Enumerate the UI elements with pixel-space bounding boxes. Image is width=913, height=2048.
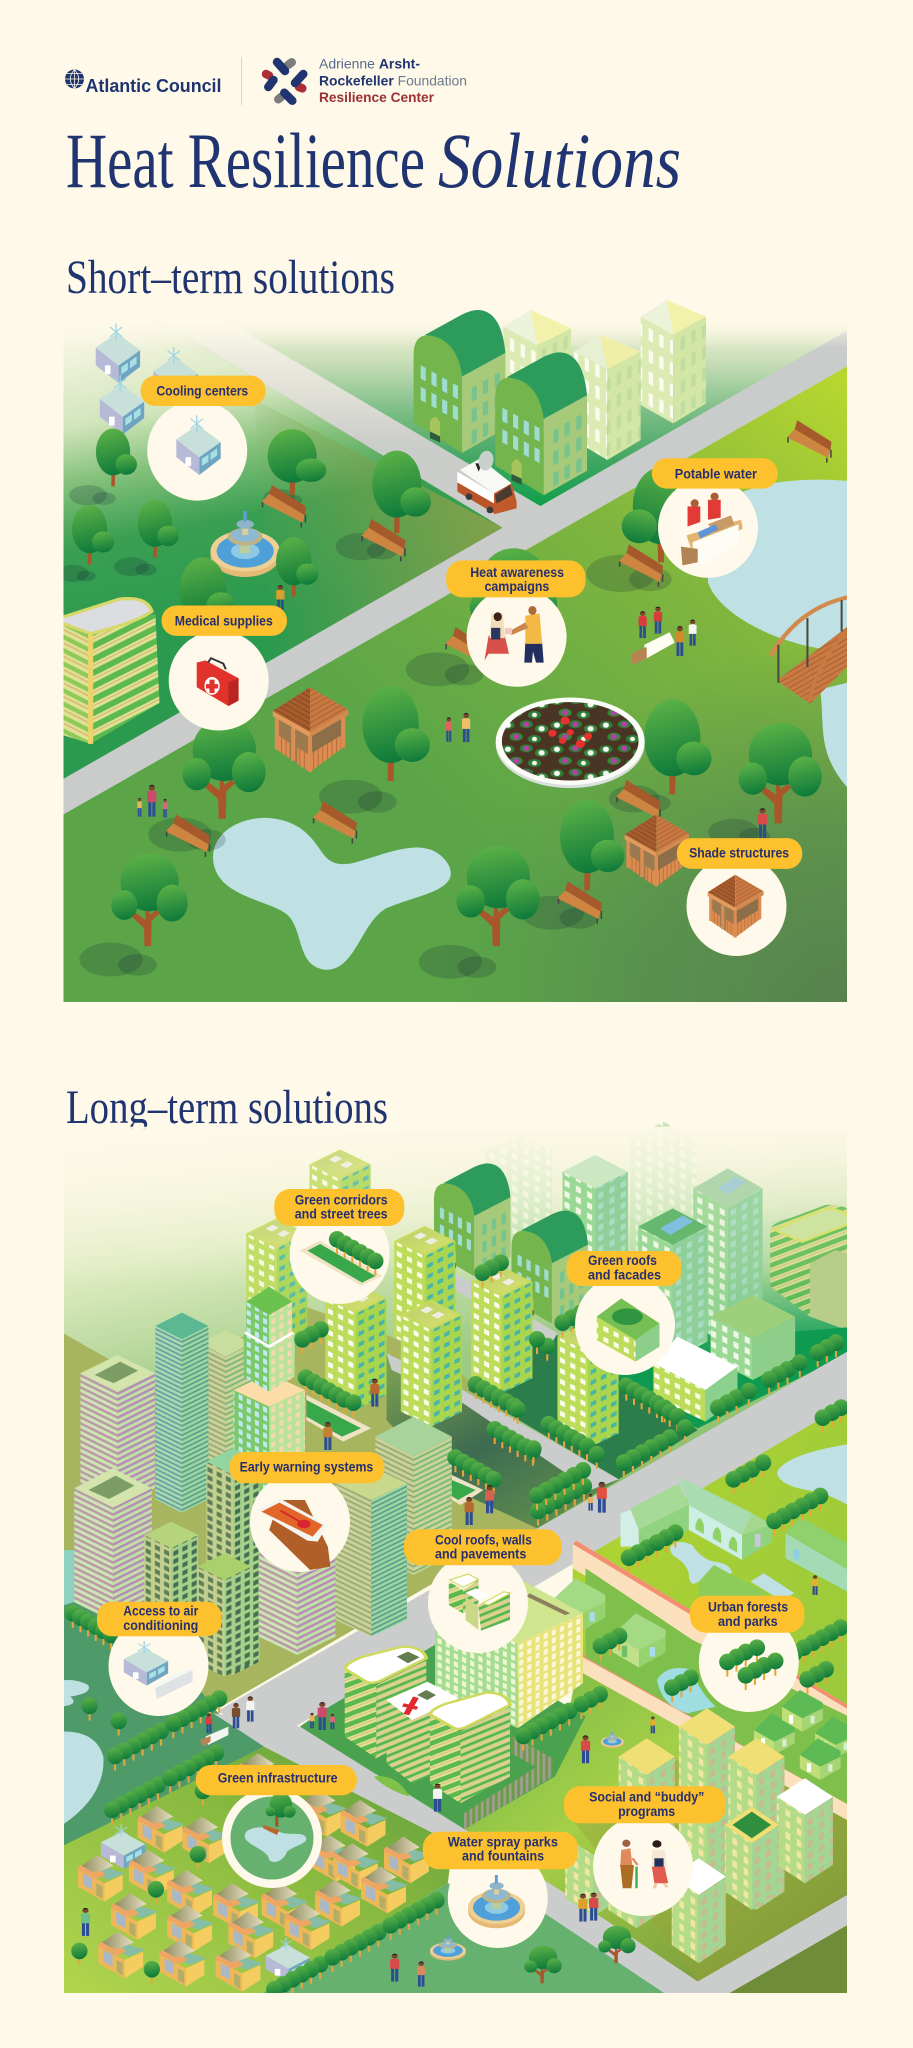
- icon: air conditioner and building: [124, 1641, 193, 1699]
- road network: [60, 326, 856, 814]
- heading: short-term: Short–term solutions: [66, 251, 395, 304]
- callout: Access to air conditioning: conditioning: [123, 1618, 198, 1633]
- callout: Access to air conditioning: [97, 1602, 222, 1716]
- trees and benches, upper lawn: [72, 429, 431, 636]
- people: [137, 585, 767, 838]
- icon: news van: [457, 449, 517, 514]
- panel: short-term scene: [57, 300, 860, 1011]
- title: Solutions: [438, 117, 681, 204]
- callout: Social and buddy programs: [564, 1786, 726, 1916]
- callout: Cool roofs, walls and pavements: Cool roofs, walls: [435, 1532, 532, 1547]
- callout: Heat awareness campaigns: [446, 560, 586, 687]
- lake right: [708, 480, 856, 654]
- icon: fountain: [211, 511, 280, 577]
- callout: Cool roofs, walls and pavements: and pavements: [435, 1547, 526, 1562]
- road: side streets: [387, 1273, 619, 1490]
- building plot: [225, 320, 847, 506]
- callout: Urban forests and parks: [690, 1596, 804, 1712]
- callout: Green roofs and facades: and facades: [588, 1267, 661, 1282]
- callout: Green infrastructure: [196, 1765, 357, 1888]
- callout: Green corridors and street trees: and street trees: [295, 1206, 388, 1221]
- ground: sky fade: [60, 1130, 856, 1563]
- road: main avenue: [218, 1347, 856, 1747]
- callout: Green roofs and facades: [567, 1251, 681, 1375]
- icon: water station: [681, 493, 743, 565]
- callout: Social and buddy programs: programs: [618, 1804, 675, 1819]
- people lower city: [81, 1575, 818, 1987]
- callout: Green corridors and street trees: [274, 1189, 404, 1304]
- ground: lower park: [60, 319, 856, 1011]
- pond: [213, 818, 451, 970]
- gazebos: [273, 687, 689, 887]
- icon: first aid kit: [197, 658, 239, 706]
- callout: Cooling centers: [141, 376, 266, 501]
- hospital complex: [345, 1573, 583, 1830]
- callout: Cool roofs, walls and pavements: [404, 1529, 562, 1653]
- fountains and park trees: [430, 1732, 636, 1983]
- park: lake and arcade buildings: [621, 1443, 854, 1600]
- title: Heat Resilience: [66, 117, 425, 204]
- logo: Resilience Center mark: [266, 62, 303, 101]
- ground: bottom green: [254, 1883, 670, 1997]
- ground: parks right: [572, 1414, 847, 1704]
- icon: green roof block: [597, 1298, 659, 1362]
- ground: central plots: [387, 1353, 619, 1528]
- callout: Water spray parks and fountains: Water spray parks: [448, 1835, 558, 1850]
- logo: Atlantic Council: [65, 70, 222, 96]
- ground: bottom right: [730, 1925, 847, 1993]
- far pale buildings: [503, 300, 706, 460]
- tree shadows: [57, 485, 770, 979]
- callout: Shade structures: [677, 838, 802, 956]
- callout: Potable water: Potable water: [675, 466, 758, 481]
- top fade, long-term: [60, 1127, 856, 1287]
- callout: Medical supplies: Medical supplies: [175, 614, 273, 629]
- street tree rows, lower: [65, 1605, 849, 2004]
- callout: Social and buddy programs: Social and “buddy”: [589, 1790, 704, 1805]
- callout: Medical supplies: [162, 606, 287, 730]
- residential towers: [565, 1690, 856, 1963]
- heading: long-term: Long–term solutions: [66, 1081, 388, 1134]
- callout: Urban forests and parks: and parks: [718, 1614, 778, 1629]
- callout: Urban forests and parks: Urban forests: [708, 1600, 788, 1615]
- callout: Green infrastructure: Green infrastructure: [218, 1771, 338, 1786]
- bridge: [771, 596, 856, 704]
- callout: Early warning systems: Early warning systems: [240, 1460, 373, 1475]
- callout: Potable water: [652, 458, 778, 578]
- ground: upper left lawn: [60, 319, 503, 783]
- ground: lakes left: [64, 1732, 104, 1824]
- left towers: [74, 1287, 452, 1677]
- icon: mini hospital: [449, 1574, 510, 1631]
- ground: informal housing: [60, 1747, 453, 1997]
- callout: Green roofs and facades: Green roofs: [588, 1253, 657, 1268]
- cooling center buildings: [96, 323, 198, 435]
- callout: Water spray parks and fountains: [423, 1832, 578, 1948]
- roads: [213, 1713, 856, 1997]
- walls: [573, 1541, 856, 1825]
- people upper city: [323, 1379, 607, 1525]
- logo: Atlantic Council: Atlantic Council: [86, 76, 222, 96]
- logo: Rockefeller Foundation wordmark: Adrienne Arsht-: [319, 56, 420, 72]
- icon: tree groups: [719, 1639, 783, 1690]
- icon: two people: [484, 606, 544, 663]
- park: pond and small houses: [552, 1578, 716, 1713]
- ground: far plots: [570, 1272, 841, 1428]
- panel: long-term scene: [60, 1122, 856, 2004]
- ground: hospital lot and lawn: [60, 1630, 856, 1997]
- callout: Early warning systems: [229, 1452, 384, 1572]
- lime towers: [246, 1149, 619, 1448]
- logo: Rockefeller Foundation wordmark: [319, 56, 467, 105]
- icon: pond with tree and bench: [245, 1792, 306, 1862]
- small park plots: [306, 1395, 483, 1505]
- street tree rows, upper: [294, 1254, 849, 1572]
- callout: Heat awareness campaigns: campaigns: [484, 579, 549, 594]
- icon: phone with thermometer: [256, 1498, 330, 1570]
- callout: Access to air conditioning: Access to air: [123, 1604, 199, 1619]
- far buildings: [434, 1155, 856, 1360]
- callout: Heat awareness campaigns: Heat awareness: [470, 565, 564, 580]
- icon: corridor: [300, 1231, 383, 1286]
- dome buildings: [414, 310, 587, 495]
- top fade, short-term: [64, 318, 847, 343]
- callout: Green corridors and street trees: Green corridors: [295, 1192, 388, 1207]
- low green-roof buildings: [653, 1295, 795, 1422]
- callout: Shade structures: Shade structures: [689, 845, 789, 860]
- flower bed: [496, 697, 645, 788]
- pale far buildings: [486, 1122, 697, 1270]
- callout: Cooling centers: Cooling centers: [156, 384, 248, 399]
- icon: two people greeting: [620, 1840, 668, 1888]
- informal housing: [71, 1753, 431, 1992]
- ground: olive tower plot: [64, 1307, 537, 1710]
- water distribution station: [631, 607, 697, 665]
- trees and benches, lower park: [111, 420, 831, 946]
- header logos: [65, 56, 467, 105]
- callout: Water spray parks and fountains: and fountains: [462, 1849, 544, 1864]
- logo: Rockefeller Foundation wordmark: Rockefeller Foundation: [319, 72, 467, 88]
- striped building: [60, 599, 159, 744]
- logo: Rockefeller Foundation wordmark: Resilience Center: [319, 89, 435, 105]
